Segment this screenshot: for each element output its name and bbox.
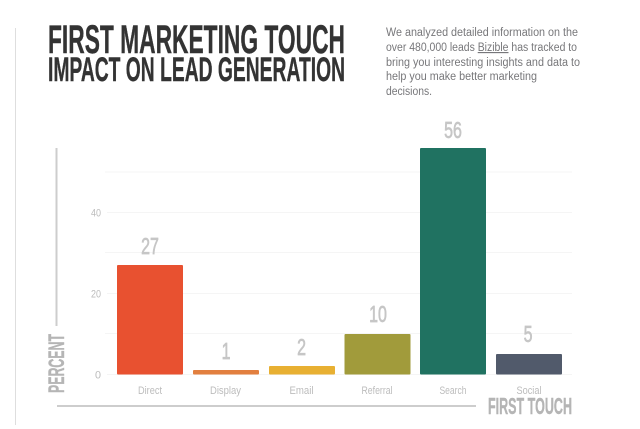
bar value labels: 5 [524,322,532,348]
category labels: Display [210,385,241,397]
title [48,18,345,89]
bar value labels: 10 [369,302,387,328]
y axis tick labels: 0 [95,370,101,382]
category labels [138,385,542,397]
intro text: decisions. [386,86,432,98]
intro text: help you make better marketing [386,71,537,83]
y axis tick labels: 40 [91,208,101,220]
title: FIRST MARKETING TOUCH [48,18,345,62]
category labels: Search [440,385,466,397]
y axis tick labels: 20 [91,288,101,300]
y axis line [56,148,58,326]
y axis tick labels [91,208,101,382]
category labels: Email [290,385,314,397]
bar value labels: 2 [297,335,306,361]
intro text: over 480,000 leads Bizible has tracked to [386,42,577,54]
title: IMPACT ON LEAD GENERATION [48,51,345,89]
bars [117,148,562,374]
x axis title: FIRST TOUCH [488,393,572,419]
bar value labels: 27 [141,234,159,260]
category labels: Direct [138,385,162,397]
bar value labels: 1 [222,339,230,365]
category labels: Referral [362,385,392,397]
category labels: Social [516,385,542,397]
bar value labels: 56 [444,118,462,144]
intro text: bring you interesting insights and data to [386,57,580,69]
x axis line [57,405,476,407]
bar value labels [141,118,532,365]
intro text [386,27,580,98]
intro text: We analyzed detailed information on the [386,27,578,39]
chart [44,118,572,419]
y axis title: PERCENT [44,334,69,393]
